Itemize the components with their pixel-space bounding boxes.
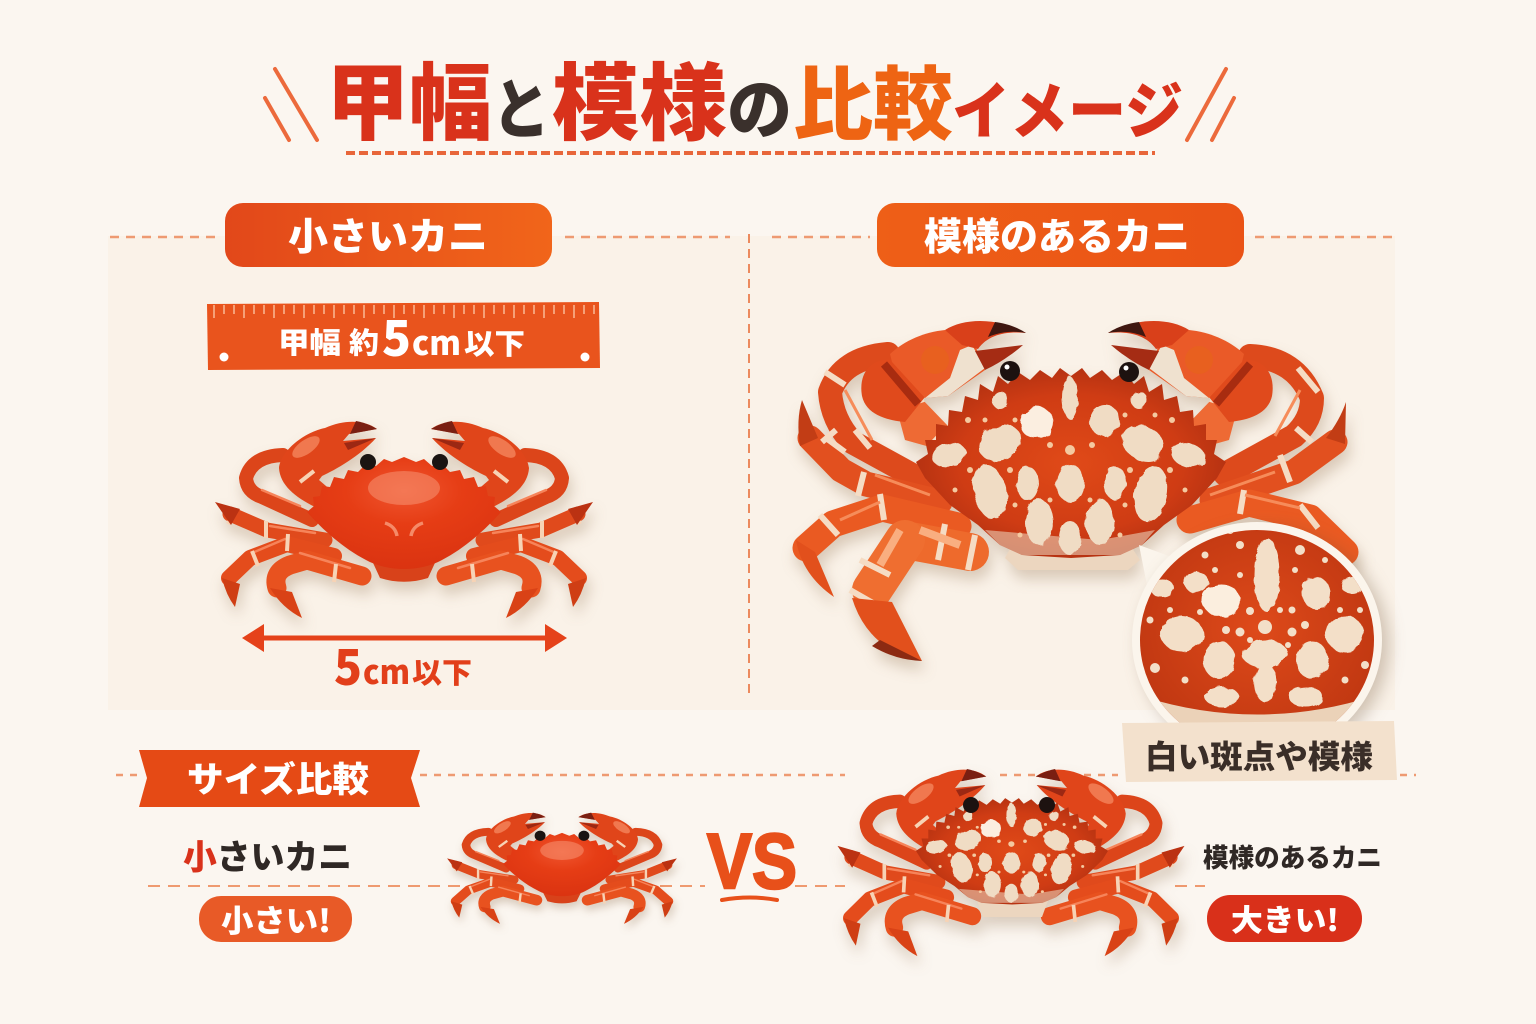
ruler tag: 甲幅 (278, 320, 341, 362)
ruler tag: 5 (382, 300, 411, 370)
badge: large (1207, 895, 1362, 942)
size comparison dashed rule (116, 774, 1416, 776)
badge: large: 大きい! (1231, 896, 1339, 940)
label: 5cm or less: 5 (334, 629, 362, 699)
legs (806, 354, 1345, 590)
badge: small (199, 896, 352, 942)
magnifier callout (1131, 520, 1398, 723)
title: と (492, 57, 550, 153)
ruler tag (207, 300, 600, 370)
ruler tag: 約 (349, 320, 379, 362)
ruler tag: cm (412, 317, 461, 365)
icon: small crab (215, 421, 593, 618)
leg tips (798, 400, 818, 446)
title (265, 37, 1234, 158)
heading: small crab (225, 203, 552, 267)
VS mark: VS (707, 817, 797, 905)
label: 5cm or less (334, 629, 472, 699)
claws (861, 321, 1026, 447)
title: 模様 (552, 37, 727, 158)
belly plate (1005, 545, 1140, 570)
title: 甲幅 (326, 37, 492, 158)
panel divider (748, 234, 750, 694)
label: 5cm or less: cm (363, 646, 410, 694)
heading: size comparison ribbon (139, 750, 420, 807)
label: patterned crab: 模様のあるカニ (1203, 838, 1382, 875)
heading: patterned crab (877, 203, 1244, 267)
icon: mini patterned crab (837, 769, 1185, 956)
carapace (916, 368, 1226, 558)
label: 5cm or less: 以下 (412, 650, 472, 692)
badge: small: 小さい! (221, 896, 331, 941)
baseline dashed rule (148, 885, 1205, 887)
ruler tag: 以下 (464, 321, 525, 363)
icon: patterned crab (796, 321, 1346, 661)
width arrow (242, 624, 567, 652)
panel: comparison background (108, 236, 1395, 710)
heading: small crab: 小さいカニ (288, 206, 488, 261)
heading: size comparison ribbon: サイズ比較 (187, 752, 369, 803)
label: white spots and pattern (1122, 721, 1397, 782)
title: 比較 (793, 41, 953, 157)
heading: patterned crab: 模様のあるカニ (924, 206, 1190, 261)
title: の (727, 57, 792, 153)
dashed heading rules (110, 236, 1395, 238)
label: small crab: 小さいカニ (183, 830, 352, 879)
label: white spots and pattern: 白い斑点や模様 (1145, 732, 1373, 778)
title: イメージ (952, 61, 1183, 151)
icon: mini small crab (447, 813, 677, 924)
eyes (1000, 361, 1020, 381)
